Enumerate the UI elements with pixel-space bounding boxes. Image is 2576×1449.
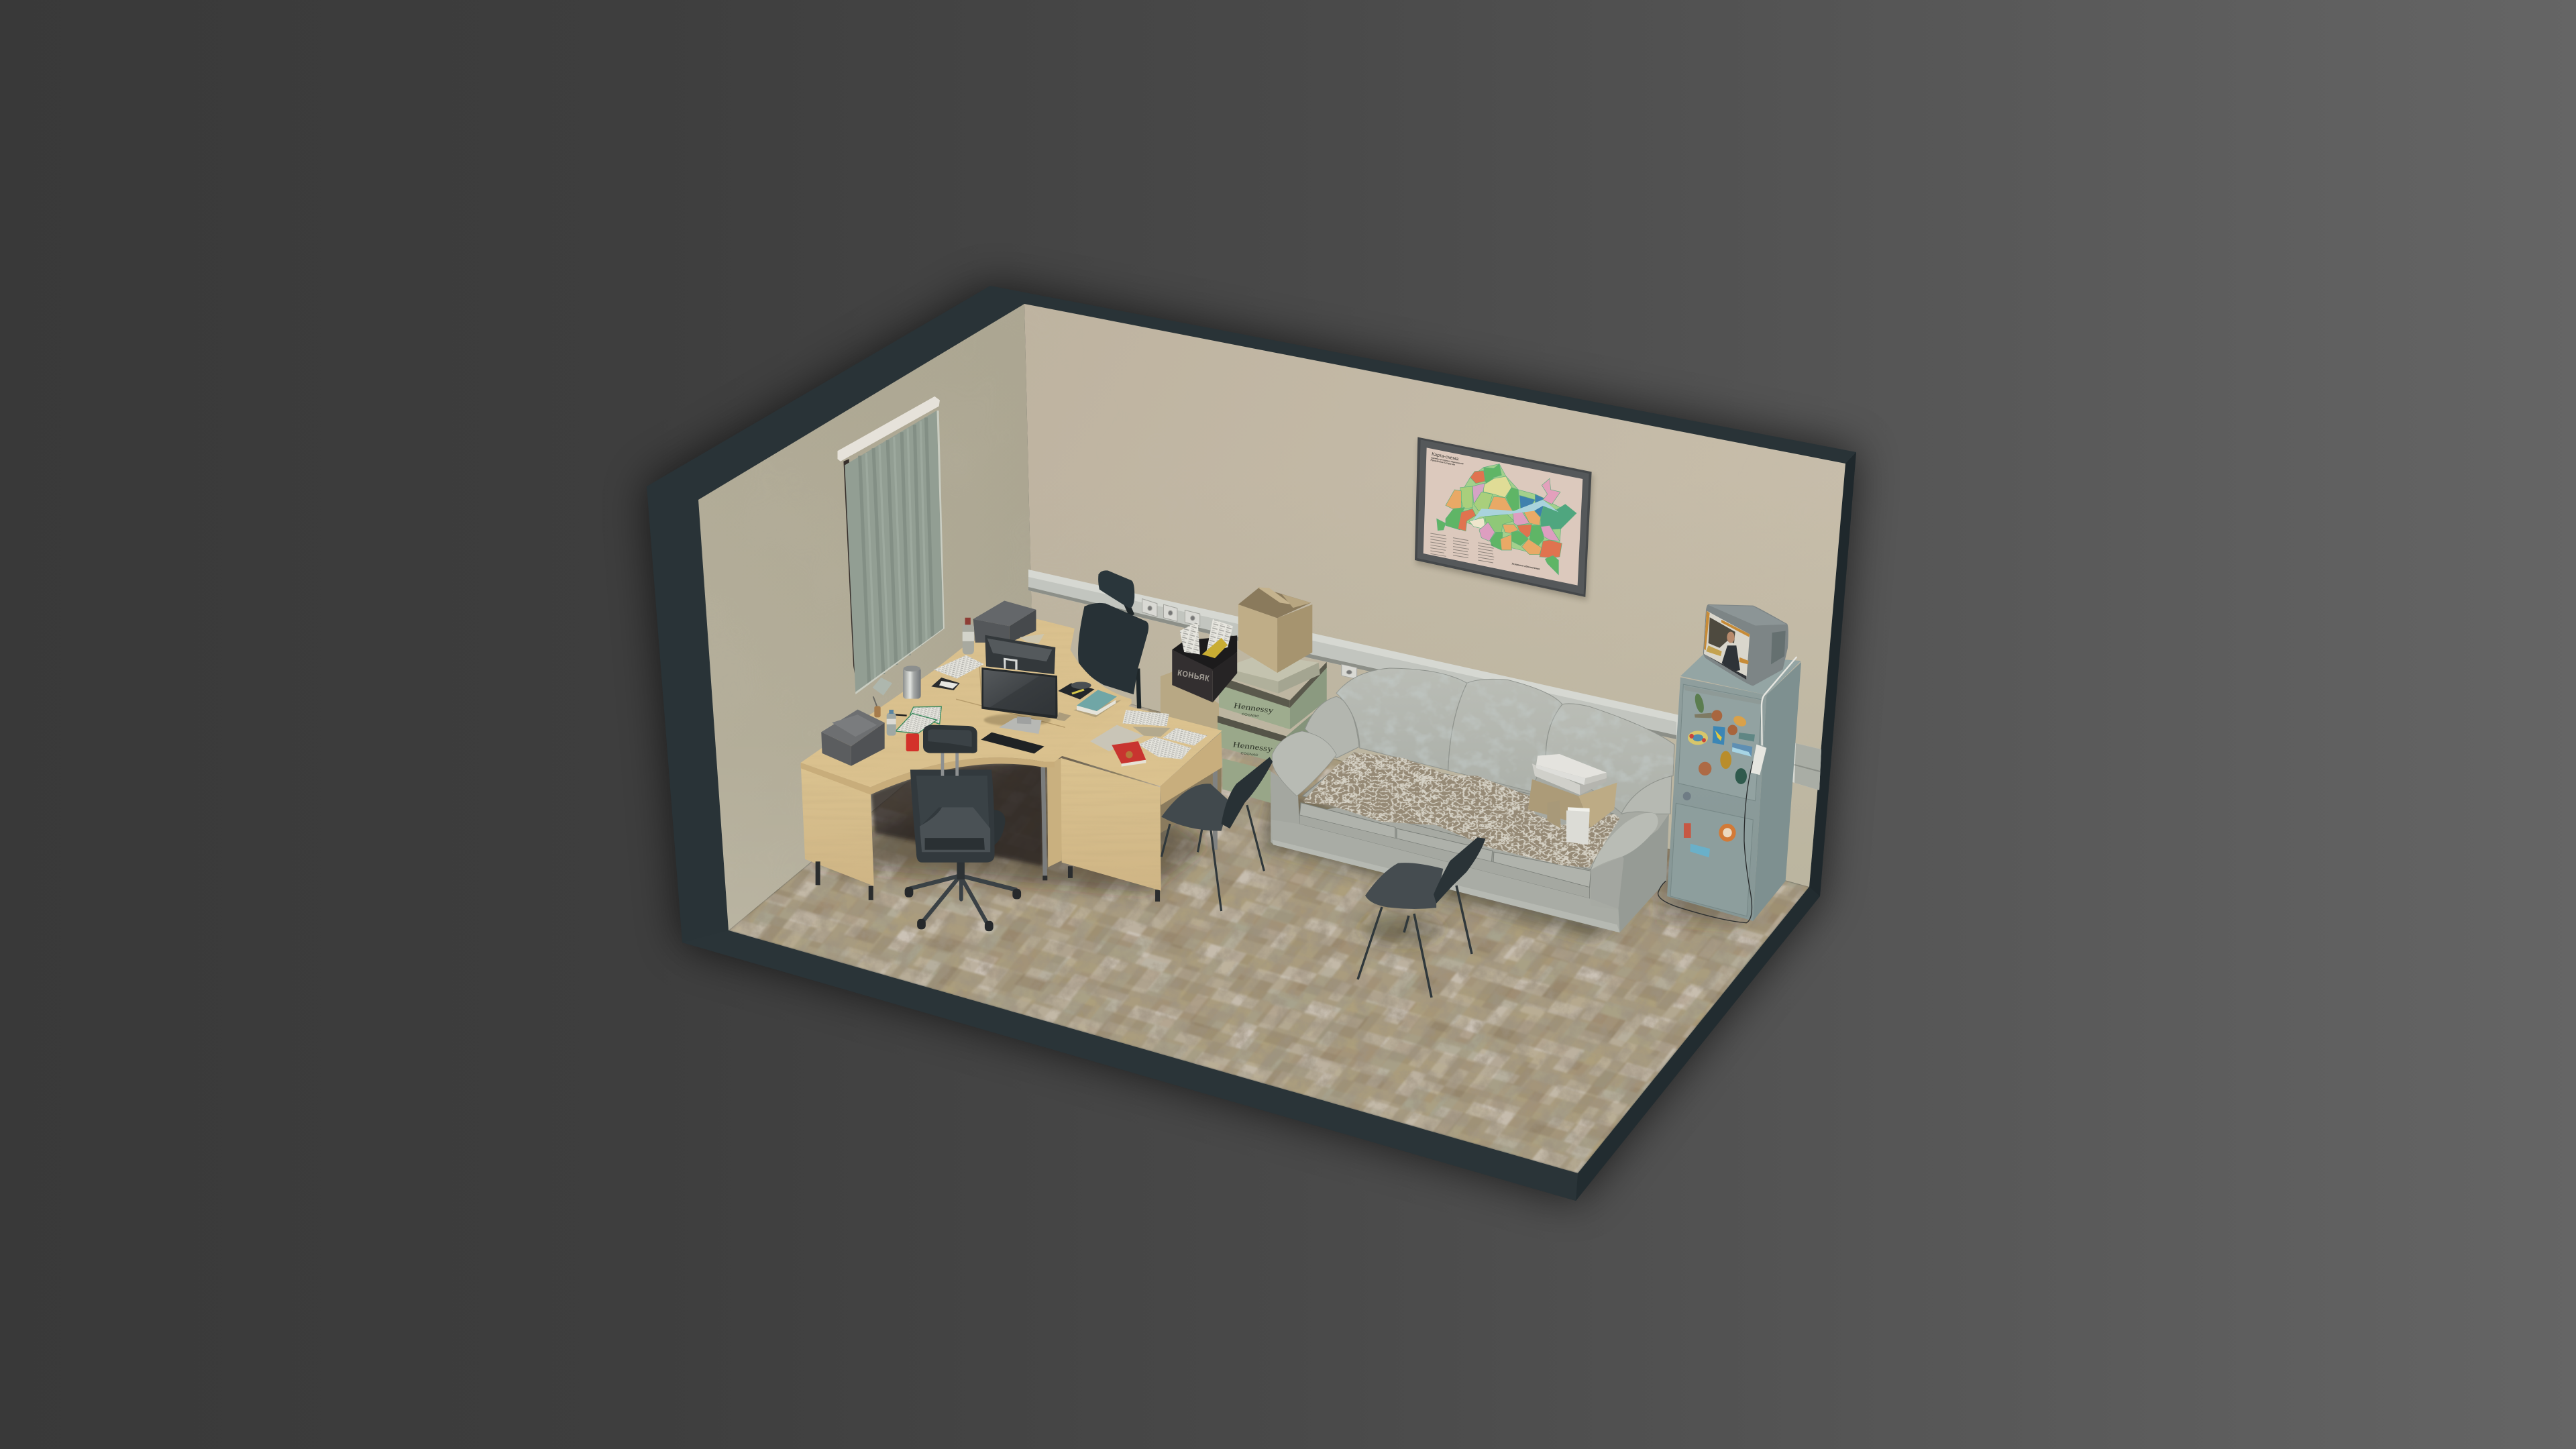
TV screen: [1704, 610, 1750, 680]
desk leg: [1040, 763, 1047, 878]
map title: [1430, 452, 1464, 468]
papers on second desk: [1122, 710, 1169, 727]
clipboards: [896, 706, 941, 733]
office chair headrest: [923, 725, 977, 776]
sofa fabric mottling: [1336, 668, 1674, 814]
red book: [1112, 741, 1146, 767]
corner desk: [801, 619, 1158, 902]
blinds cornice: [837, 396, 940, 462]
small bottle: [887, 710, 896, 736]
water bottle: [963, 618, 974, 654]
newspaper stack: [934, 655, 984, 679]
desk lamp: [873, 678, 892, 717]
metal kettle: [903, 665, 921, 699]
window blinds: [837, 396, 945, 694]
sofa base front: [1271, 820, 1619, 932]
black chair by desk: [1161, 757, 1273, 911]
sofa right arm: [1591, 813, 1669, 932]
white shoebox: [1532, 754, 1607, 795]
framed map of Tatarstan: [1415, 437, 1593, 600]
grey box lid: [1224, 654, 1319, 682]
headrest bracket: [943, 751, 957, 776]
back monitor: [985, 635, 1055, 674]
small tan papers by printer: [1020, 634, 1044, 643]
red mug: [906, 733, 919, 751]
sofa seat cushions: [1299, 753, 1614, 888]
keyboard: [981, 733, 1044, 753]
desk feet: [818, 861, 1158, 902]
fridge magnets: [1684, 692, 1755, 857]
patterned blanket: [1303, 753, 1619, 867]
map title: Республики Татарстан: [1430, 459, 1455, 466]
desk end panel: [801, 763, 874, 886]
floor shadows under furniture: [805, 738, 1778, 944]
desk right panel: [1047, 758, 1062, 867]
map water: [1472, 500, 1558, 521]
wall sockets: [1142, 599, 1357, 679]
deep shadow under corner desk: [871, 762, 1044, 866]
sofa back cushions: [1336, 668, 1674, 814]
chair base: [909, 873, 1016, 925]
konyak box with papers: [1172, 619, 1237, 702]
map title: административных образований: [1431, 456, 1464, 465]
fridge: [1658, 605, 1801, 923]
front printer: [821, 710, 885, 766]
floor: patchwork linoleum: [729, 678, 1809, 1173]
big black executive chair behind desk: [1078, 570, 1148, 708]
front monitor: [981, 667, 1058, 734]
second desk: [1061, 705, 1222, 891]
phone: [1058, 682, 1095, 700]
small white box: [1566, 807, 1590, 845]
white power cable and black cable: [1762, 657, 1796, 745]
konyak box with papers: КОНЬЯК: [1177, 669, 1210, 684]
back wall: [1024, 304, 1845, 887]
upper Hennessy box: Hennessy: [1233, 701, 1275, 715]
room shell: dark outer walls and base: [647, 286, 1856, 1201]
calculator: [931, 678, 960, 690]
map legend: [1430, 533, 1494, 563]
fridge upper door: [1678, 684, 1762, 801]
left wall: [698, 304, 1033, 930]
map districts: [1437, 464, 1576, 575]
tan box on sofa: [1528, 780, 1617, 827]
lower Hennessy box: COGNAC: [1240, 752, 1258, 757]
white cable duct on back wall: [1028, 570, 1821, 790]
sofa base: [1271, 769, 1669, 932]
power strip: [1751, 745, 1766, 775]
tan box behind desk: [1161, 672, 1219, 745]
sofa left arm: [1271, 731, 1336, 824]
stacked cognac boxes: [1161, 654, 1327, 803]
chair seat cushion: [992, 810, 1006, 845]
office swivel chair: [905, 769, 1021, 931]
chair back frame: [910, 769, 995, 863]
black chair on floor: [1358, 837, 1486, 998]
lower Hennessy box: [1218, 704, 1324, 803]
desk items: printers, monitors, papers, stationery: [821, 586, 1208, 767]
fridge lower door: [1670, 803, 1753, 916]
lower Hennessy box: Hennessy: [1232, 740, 1273, 753]
upper Hennessy box: [1219, 662, 1327, 729]
sofa: [1271, 668, 1674, 932]
room shell shadow: [647, 286, 1856, 1201]
paper bag: [1547, 800, 1561, 828]
small brown paper: [1057, 712, 1071, 721]
teal folder: [1073, 690, 1122, 717]
sofa right arm back: [1621, 776, 1672, 814]
desk top: [801, 619, 1132, 787]
sofa front rail: [1299, 815, 1590, 898]
pen: [895, 714, 907, 716]
map title: Карта-схема: [1432, 452, 1459, 462]
cardboard box on top: [1238, 588, 1312, 673]
TV: [1704, 605, 1788, 685]
sofa back left arm: [1305, 696, 1359, 758]
upper Hennessy box: COGNAC: [1241, 712, 1259, 718]
framed map of Tatarstan: Условные обозначения: [1511, 562, 1540, 570]
back printer: [969, 586, 1036, 643]
